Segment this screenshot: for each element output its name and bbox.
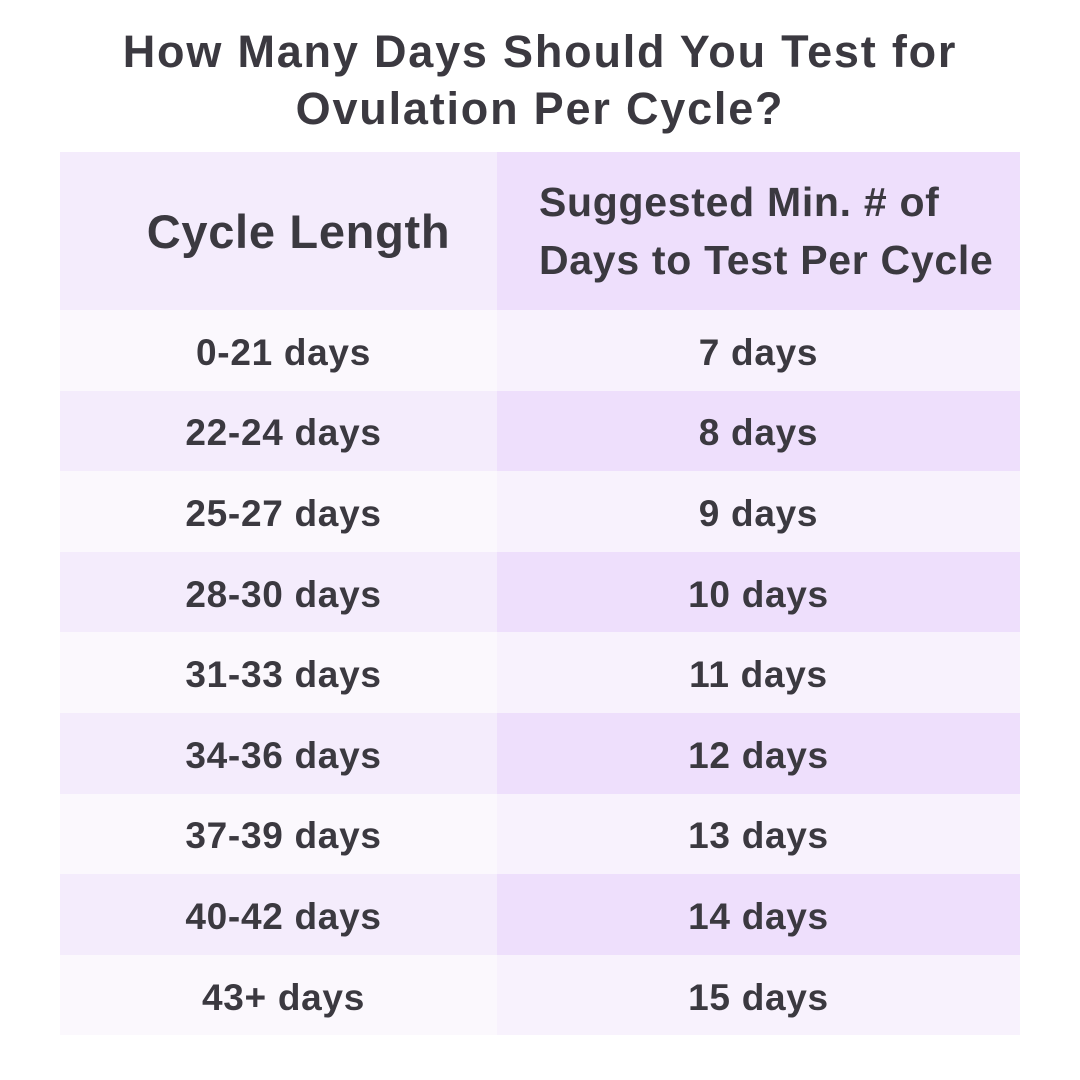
row 31-33: 11 days [689,654,828,695]
row 37-39: 37-39 days [185,815,382,856]
title [123,26,957,134]
row 40-42: 14 days [688,896,829,937]
row 34-36: 34-36 days [185,735,382,776]
row 43+: 15 days [688,977,829,1018]
row 0-21: 7 days [699,332,818,373]
header row: Cycle Length [147,204,450,258]
row 40-42 [60,874,1020,955]
row 28-30: 10 days [688,574,829,615]
row 28-30: 28-30 days [185,574,382,615]
row 40-42: 40-42 days [185,896,382,937]
row 43+: 43+ days [202,977,365,1018]
row 0-21: 0-21 days [196,332,371,373]
row 31-33 [185,632,1020,713]
header row [60,152,1020,310]
row 37-39 [185,794,1020,874]
row 22-24: 22-24 days [185,412,382,453]
row 37-39: 13 days [688,815,829,856]
row 25-27: 25-27 days [185,493,382,534]
row 43+ [202,955,1020,1035]
row 34-36: 12 days [688,735,829,776]
row 25-27 [185,471,1020,552]
row 25-27: 9 days [699,493,818,534]
title: How Many Days Should You Test for [123,26,957,77]
row 0-21 [196,310,1020,391]
header row: Days to Test Per Cycle [539,237,993,283]
header row: Suggested Min. # of [539,179,940,225]
row 31-33: 31-33 days [185,654,382,695]
table [60,152,1020,1035]
row 22-24: 8 days [699,412,818,453]
row 22-24 [60,391,1020,471]
row 34-36 [60,713,1020,794]
title: Ovulation Per Cycle? [296,83,784,134]
row 28-30 [60,552,1020,632]
